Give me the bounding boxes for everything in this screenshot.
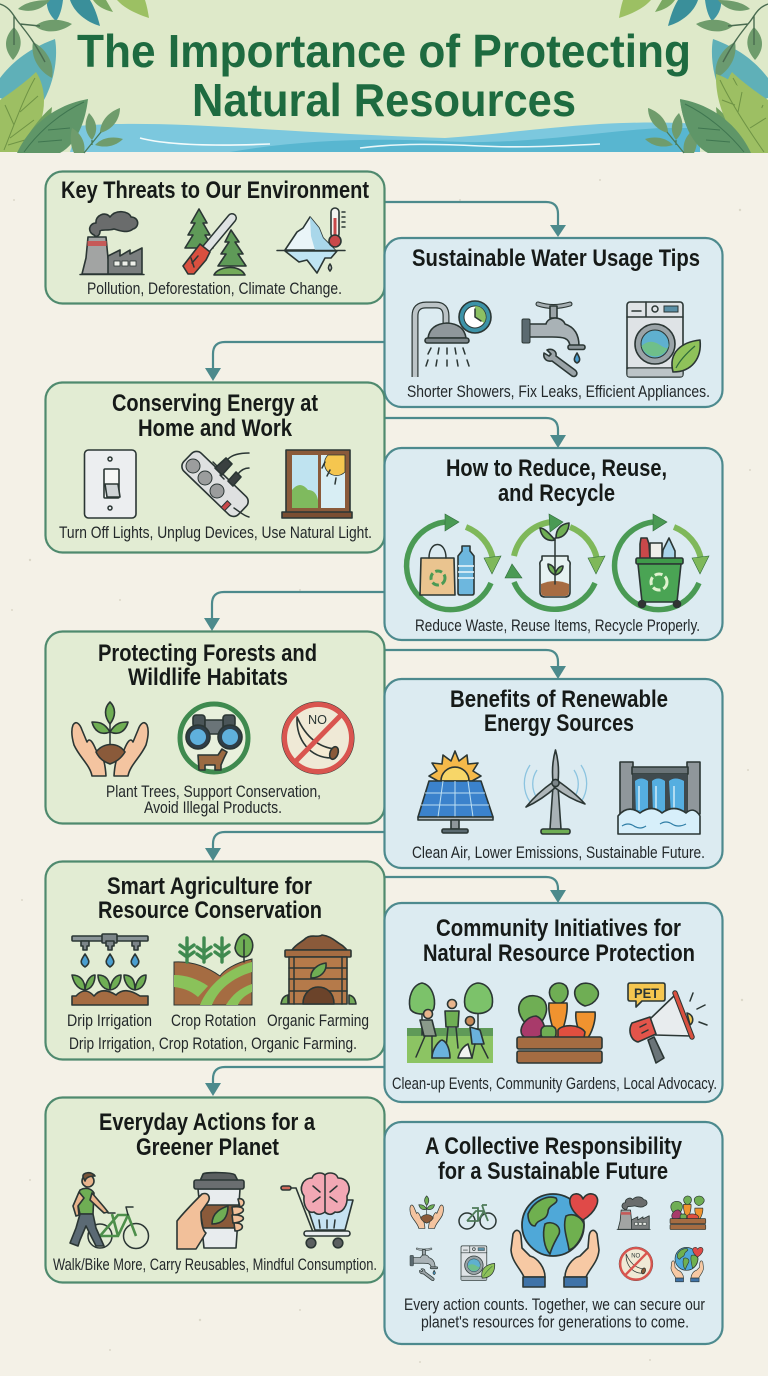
heading: conserving energy: Conserving Energy at xyxy=(112,390,318,417)
heading: renewable: Energy Sources xyxy=(484,710,634,737)
icon: drip irrigation xyxy=(72,934,148,1005)
icon: efficient washing machine xyxy=(627,302,700,377)
heading: water usage: Sustainable Water Usage Tips xyxy=(412,245,700,272)
caption: everyday: Walk/Bike More, Carry Reusables, Mindful Consumption. xyxy=(53,1255,377,1274)
panel: community initiatives xyxy=(384,903,722,1102)
icon: chainsaw and trees xyxy=(183,209,246,275)
arrow: recycle to forests xyxy=(204,592,384,631)
heading: everyday: Everyday Actions for a xyxy=(99,1109,316,1136)
icon: hands planting tree xyxy=(72,702,148,776)
caption: forests: Plant Trees, Support Conservation, xyxy=(106,782,321,801)
panel: key threats xyxy=(46,172,384,304)
caption: water: Shorter Showers, Fix Leaks, Efficient Appliances. xyxy=(407,382,710,401)
heading: agriculture: Resource Conservation xyxy=(98,897,322,924)
icon: small planting hands xyxy=(410,1196,443,1228)
heading: reduce reuse recycle: How to Reduce, Reuse, xyxy=(446,455,667,482)
heading: renewable: Benefits of Renewable xyxy=(450,686,668,713)
leaves: top right xyxy=(619,0,768,153)
heading: collective: A Collective Responsibility xyxy=(425,1133,683,1160)
panel: conserving energy xyxy=(46,382,384,552)
heading: agriculture: Smart Agriculture for xyxy=(107,873,312,900)
arrow: energy to recycle xyxy=(384,418,566,448)
panel: everyday actions xyxy=(46,1098,384,1282)
icon: reusable coffee cup xyxy=(177,1173,244,1249)
heading: renewable xyxy=(450,686,668,737)
caption: threats: Pollution, Deforestation, Climate Change. xyxy=(87,279,342,298)
arrow: threats to water xyxy=(384,202,566,237)
panel: water usage xyxy=(384,238,722,407)
leaves: right large leaf xyxy=(680,74,768,153)
heading: conserving energy xyxy=(112,390,318,442)
icon: power strip and plugs xyxy=(179,449,251,519)
icon: melting iceberg and thermometer xyxy=(277,208,345,273)
icon: mindful shopping cart xyxy=(281,1173,353,1248)
icon: crop rotation fields xyxy=(174,934,253,1005)
labels: farming methods: Organic Farming xyxy=(267,1011,369,1030)
heading: key threats: Key Threats to Our Environment xyxy=(61,177,369,204)
heading: conserving energy: Home and Work xyxy=(138,415,293,442)
panel: reduce reuse recycle xyxy=(384,448,722,640)
arrow: forests to renewable xyxy=(384,650,566,679)
icon: globe in hands with heart xyxy=(511,1194,599,1287)
heading: forests: Wildlife Habitats xyxy=(128,664,288,691)
icon: reduce cycle with bag and bottle xyxy=(407,514,501,610)
closing text xyxy=(404,1295,705,1332)
icon: community garden crate xyxy=(517,983,602,1063)
icon: small washer xyxy=(461,1246,495,1280)
caption: renewable: Clean Air, Lower Emissions, Sustainable Future. xyxy=(412,843,705,862)
arrow: renewable to agriculture xyxy=(205,832,384,861)
icon: no illegal ivory: NO xyxy=(308,712,327,727)
icon: no illegal ivory xyxy=(282,702,354,774)
icon: community clean-up xyxy=(407,983,493,1063)
icon: small bicycle xyxy=(459,1205,496,1229)
icon: leaking tap with wrench xyxy=(522,304,585,376)
arrow: community to everyday actions xyxy=(205,1067,384,1096)
icon: factory pollution xyxy=(80,212,144,274)
title: The Importance of Protecting xyxy=(77,25,691,77)
leaves: top left xyxy=(0,0,149,153)
icon: reuse cycle with jar and plant xyxy=(505,514,605,609)
icon: wind turbine xyxy=(524,750,587,834)
icon: megaphone with speech bubble xyxy=(628,983,707,1063)
arrow: agriculture to community xyxy=(384,877,566,903)
closing text: Every action counts. Together, we can secure our xyxy=(404,1295,705,1314)
panel: smart agriculture xyxy=(46,862,384,1060)
heading: reduce reuse recycle: and Recycle xyxy=(498,480,615,507)
icon: light switch xyxy=(84,450,136,518)
heading: everyday: Greener Planet xyxy=(136,1134,279,1161)
heading: everyday xyxy=(99,1109,316,1161)
caption: agriculture: Drip Irrigation, Crop Rotation, Organic Farming. xyxy=(69,1034,357,1053)
heading: collective: for a Sustainable Future xyxy=(438,1158,668,1185)
heading: forests: Protecting Forests and xyxy=(98,640,317,667)
labels: farming methods: Crop Rotation xyxy=(171,1011,256,1030)
icon: window with sunlight xyxy=(282,450,352,518)
icon: shower with timer xyxy=(415,301,491,377)
heading: collective xyxy=(425,1133,683,1185)
header banner xyxy=(0,0,768,153)
icon: solar panel xyxy=(418,751,493,833)
heading: agriculture xyxy=(98,873,322,924)
panel: collective responsibility xyxy=(384,1122,722,1344)
caption: forests: Avoid Illegal Products. xyxy=(144,798,282,817)
icon: megaphone with speech bubble: PET xyxy=(634,985,659,1001)
title xyxy=(77,25,691,126)
panel: renewable energy xyxy=(384,679,722,868)
heading: community: Natural Resource Protection xyxy=(423,940,695,967)
icon: small vegetable crate xyxy=(670,1196,706,1230)
heading: community xyxy=(423,915,695,967)
icon: hydro dam xyxy=(618,762,700,834)
icon: compost bin xyxy=(281,935,356,1004)
arrow: water to energy xyxy=(205,342,384,381)
panel: forests and wildlife xyxy=(46,632,384,824)
labels: farming methods xyxy=(67,1011,369,1030)
icon: recycle cycle with bin xyxy=(615,514,709,610)
icon: small globe in hands xyxy=(671,1247,704,1282)
icon: small factory xyxy=(617,1197,650,1230)
icon: binoculars with wildlife xyxy=(178,702,250,774)
heading: forests xyxy=(98,640,317,691)
water strip xyxy=(70,122,700,152)
icon: small no-ivory sign xyxy=(619,1247,653,1281)
heading: community: Community Initiatives for xyxy=(436,915,681,942)
labels: farming methods: Drip Irrigation xyxy=(67,1011,152,1030)
title: Natural Resources xyxy=(192,74,576,126)
icon: person walking a bike xyxy=(70,1173,148,1248)
closing text: planet's resources for generations to come. xyxy=(421,1312,689,1332)
caption: recycle: Reduce Waste, Reuse Items, Recycle Properly. xyxy=(415,616,700,635)
heading: reduce reuse recycle xyxy=(446,455,667,507)
caption: forests xyxy=(106,782,321,817)
icon: small tap xyxy=(410,1249,438,1281)
caption: energy: Turn Off Lights, Unplug Devices, Use Natural Light. xyxy=(59,523,372,542)
